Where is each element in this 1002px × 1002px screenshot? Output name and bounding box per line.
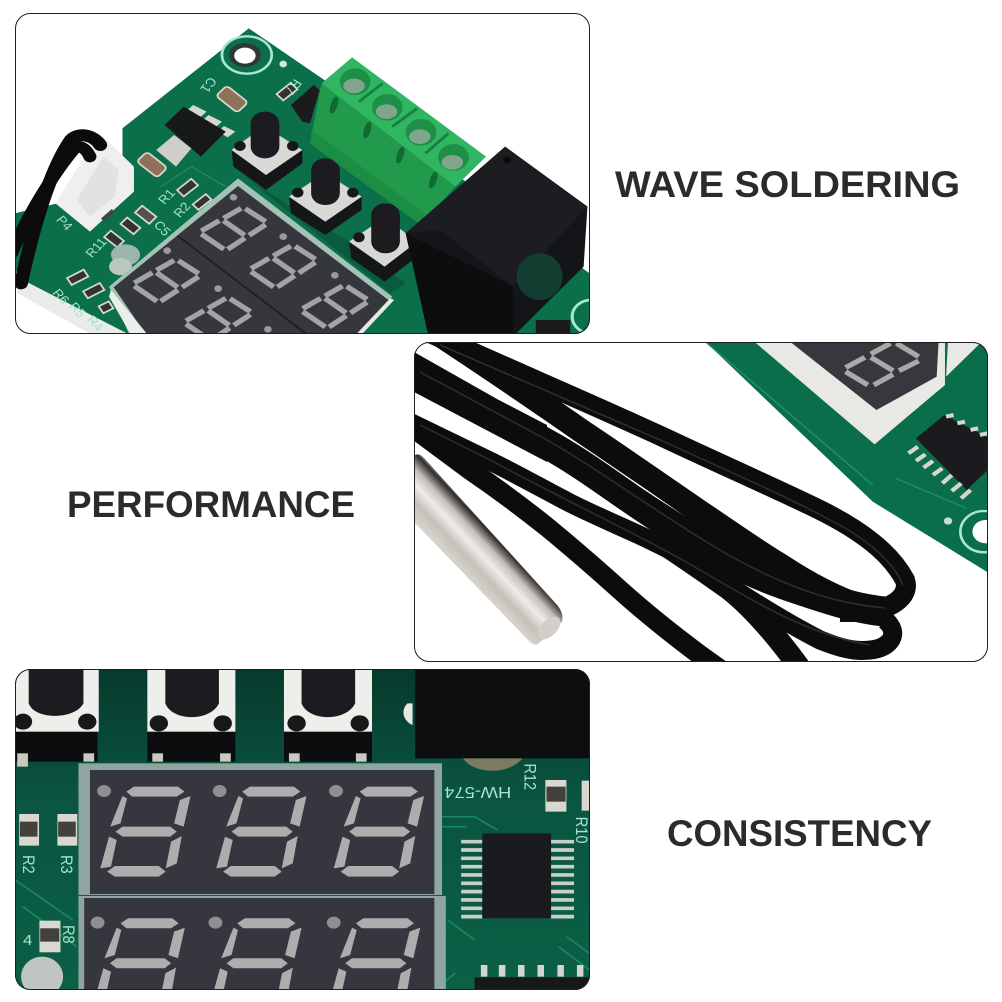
- silkscreen labels: C5: [151, 218, 174, 239]
- lower display module: [78, 896, 446, 1000]
- green terminal block: [310, 57, 486, 225]
- circuit board: [15, 28, 589, 337]
- silkscreen labels: [49, 75, 305, 333]
- heading: consistency: CONSISTENCY: [667, 813, 932, 854]
- silkscreen labels: [19, 763, 590, 949]
- circuit traces: [15, 817, 589, 993]
- board corner: [705, 342, 989, 573]
- tactile button 2: [147, 668, 235, 762]
- integrated circuit: [908, 415, 989, 498]
- silkscreen labels: R4: [84, 313, 107, 333]
- lower digits: [95, 918, 420, 1000]
- push button 2: [289, 158, 362, 235]
- cable: lower left: [415, 435, 726, 661]
- upper digits: [100, 787, 424, 877]
- cable: lower pair: [405, 420, 893, 651]
- main chip: [461, 833, 574, 918]
- push button 1: [232, 112, 302, 190]
- silkscreen labels: R8: [59, 925, 77, 944]
- silkscreen labels: HW-574: [444, 783, 511, 802]
- heading: wave soldering: WAVE SOLDERING: [615, 164, 960, 205]
- steel temperature probe: [414, 454, 565, 645]
- LED: [21, 957, 63, 997]
- relay: [406, 147, 587, 337]
- panel: wave soldering photo: [11, 13, 610, 339]
- cable: middle pair: [405, 365, 890, 612]
- corner hole and part: [536, 298, 590, 333]
- silkscreen labels: R11: [82, 235, 110, 260]
- capacitors and resistors: [67, 83, 297, 313]
- silkscreen labels: 4: [23, 933, 33, 949]
- lower chip: [475, 965, 593, 994]
- display digits: [134, 208, 367, 339]
- display digit: [846, 343, 919, 385]
- silkscreen labels: R2: [19, 855, 37, 874]
- tactile button 3: [284, 668, 372, 762]
- cable: outer loop: [430, 333, 906, 612]
- LED display module: [109, 178, 394, 339]
- silkscreen labels: R7: [282, 77, 305, 97]
- silkscreen labels: R2: [170, 199, 194, 220]
- silkscreen labels: C1: [197, 75, 220, 95]
- LED: [109, 244, 140, 275]
- silkscreen labels: R5: [66, 299, 89, 320]
- board mounting hole: [944, 510, 987, 554]
- relay base: [403, 667, 591, 771]
- sensor connector: [55, 137, 134, 232]
- push button 3: [349, 203, 417, 282]
- panel: sensor probe and cable photo: [414, 342, 988, 662]
- silkscreen labels: R10: [572, 817, 590, 844]
- silkscreen labels: R6: [49, 286, 73, 307]
- silkscreen labels: P4: [53, 213, 76, 233]
- tactile button 1: [14, 668, 99, 767]
- heading: performance: PERFORMANCE: [67, 484, 355, 525]
- mounting hole: [222, 36, 287, 74]
- silkscreen labels: R3: [57, 855, 75, 874]
- small black transistor: [291, 85, 320, 123]
- sensor wires: [11, 135, 100, 283]
- upper display module: [78, 763, 442, 895]
- cable: inner loop: [435, 346, 854, 591]
- panel: consistency close-up photo: [14, 667, 593, 1000]
- silkscreen labels: R12: [520, 763, 538, 790]
- cable: bottom branch: [662, 556, 808, 661]
- voltage regulator: [156, 105, 235, 167]
- surface-mount resistors: [19, 780, 593, 952]
- silkscreen labels: R1: [155, 186, 178, 207]
- cable highlights: [420, 345, 903, 645]
- cable: left start: [414, 352, 547, 462]
- black sensor cables: [400, 333, 906, 680]
